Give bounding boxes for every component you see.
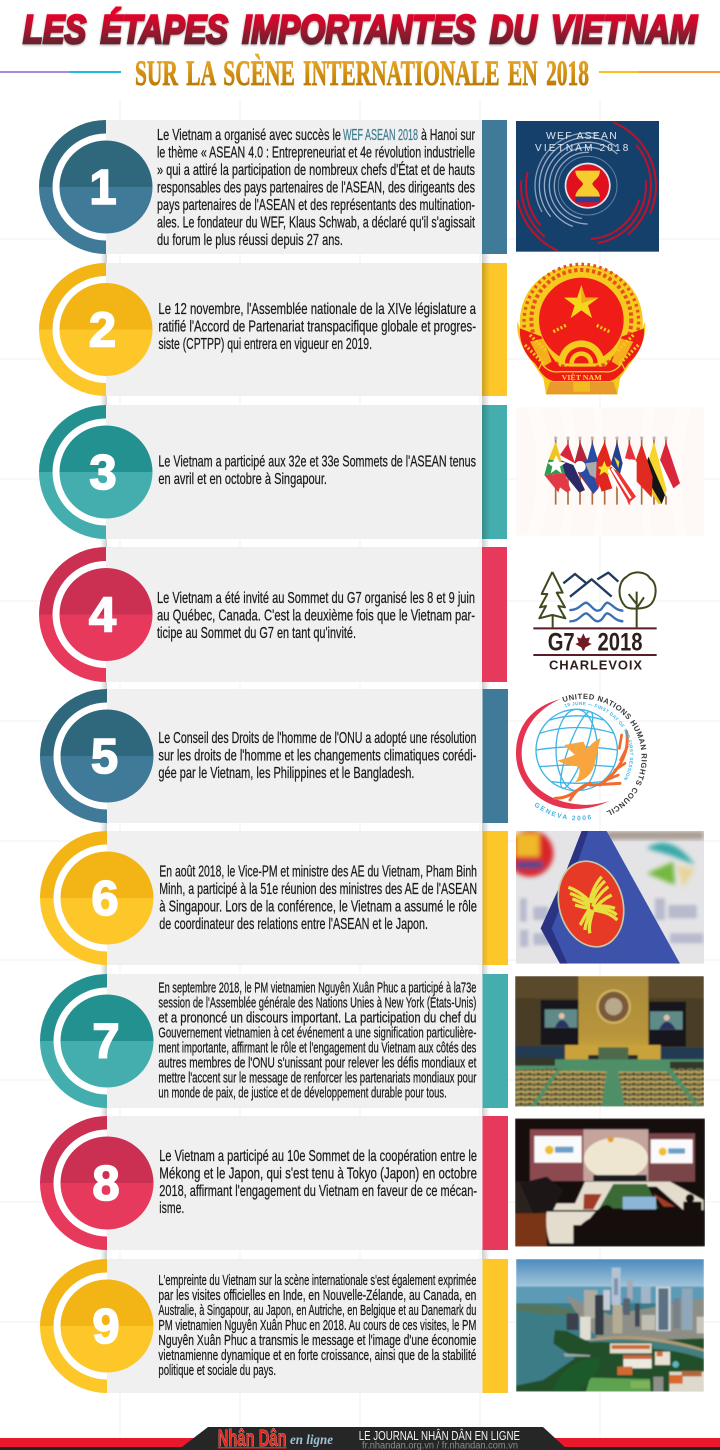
footer bar: [0, 1425, 720, 1450]
footer text: LE JOURNAL NHÂN DÂN EN LIGNE: [359, 1428, 520, 1443]
panel: milestone 2: [39, 263, 645, 396]
text block 6: à Singapour. Lors de la conférence, le Vietnam a assumé le rôle: [159, 899, 477, 916]
text block 9: politique et sociale du pays.: [158, 1363, 276, 1379]
panel: milestone 8: [40, 1116, 705, 1250]
panel: milestone 7: [40, 974, 704, 1108]
text block 4: au Québec, Canada. C'est la deuxième fois que le Vietnam par-: [157, 608, 475, 624]
badge: number 8: [40, 1116, 154, 1250]
image: UN Human Rights Council logo: 19 JUNE — FIRST DAY OF THE FIRST SESSION: [564, 702, 634, 780]
text block 7: mettre l'accent sur le message de renforcer les partenariats mondiaux pour: [158, 1071, 477, 1087]
text block 1: » qui a attiré la participation de nombreux chefs d'État et de hauts: [157, 160, 475, 179]
badge: number 9: [40, 1259, 154, 1393]
text block 1: Le Vietnam a organisé avec succès le: [157, 127, 341, 144]
image: G7 2018 Charlevoix logo: G7: [548, 629, 575, 657]
image: Mekong-Japan summit photo: [515, 1118, 705, 1247]
image: UN Human Rights Council logo: UNITED NATIONS HUMAN RIGHTS COUNCIL: [562, 694, 647, 816]
badge: number 4: 4: [89, 588, 116, 642]
image: WEF ASEAN Vietnam 2018 logo: WEF ASEAN: [546, 131, 617, 142]
text block 4: [157, 590, 475, 642]
text block 7: et a prononcé un discours important. La participation du chef du: [158, 1011, 476, 1027]
image: Singapore skyline photo: [516, 1259, 704, 1392]
text block 5: Le Conseil des Droits de l'homme de l'ONU a adopté une résolution: [158, 730, 476, 747]
text block 6: En août 2018, le Vice-PM et ministre des AE du Vietnam, Pham Binh: [159, 864, 477, 881]
badge: number 8: 8: [92, 1157, 120, 1211]
text block 7: Gouvernement vietnamien à cet événement a une signification particulière-: [158, 1026, 477, 1042]
image: G7 2018 Charlevoix logo: 2018: [598, 629, 643, 657]
text block 7: [158, 981, 477, 1102]
image: G7 2018 Charlevoix logo: CHARLEVOIX: [549, 657, 642, 672]
gap shadows: [100, 246, 490, 1267]
text block 2: Le 12 novembre, l'Assemblée nationale de la XIVe législature a: [158, 301, 476, 318]
image: ASEAN flag photo: [507, 830, 704, 964]
text block 6: Minh, a participé à la 51e réunion des ministres des AE de l'ASEAN: [159, 881, 477, 898]
badge: number 6: [40, 831, 154, 965]
panel: milestone 9: [40, 1259, 704, 1393]
text block 2: ratifié l'Accord de Partenariat transpacifique globale et progres-: [158, 318, 476, 336]
badge: number 6: 6: [91, 872, 119, 926]
text block 1: WEF ASEAN 2018: [343, 127, 418, 144]
text block 1: le thème « ASEAN 4.0 : Entrepreneuriat et 4e révolution industrielle: [157, 144, 475, 162]
text block 9: vietnamienne dynamique et en forte croissance, ainsi que de la stabilité: [158, 1348, 476, 1364]
text block 8: [159, 1148, 477, 1217]
badge: number 7: 7: [92, 1015, 120, 1069]
badge: number 5: [40, 689, 154, 823]
text block 5: sur les droits de l'homme et les changements climatiques corédi-: [158, 748, 476, 764]
text block 2: [158, 301, 476, 353]
badge: number 5: 5: [91, 730, 118, 784]
badge: number 9: 9: [92, 1300, 120, 1354]
panel: milestone 3: [39, 405, 704, 539]
text block 9: PM vietnamien Nguyên Xuân Phuc en 2018. Au cours de ces visites, le PM: [158, 1318, 476, 1334]
image: UN Human Rights Council logo: GENEVA 2006: [534, 802, 591, 820]
badge: number 1: 1: [89, 161, 117, 215]
text block 4: ticipe au Sommet du G7 en tant qu'invité.: [157, 625, 356, 642]
badge: number 3: [39, 405, 152, 539]
text block 8: Le Vietnam a participé au 10e Sommet de la coopération entre le: [159, 1148, 477, 1165]
text block 9: [158, 1273, 476, 1379]
text block 6: [159, 864, 477, 933]
image: UN Human Rights Council logo: [516, 694, 647, 820]
text block 1: du forum le plus réussi depuis 27 ans.: [157, 232, 343, 249]
text block 7: En septembre 2018, le PM vietnamien Nguyên Xuân Phuc a participé à la73e: [158, 981, 476, 997]
text block 1: pays partenaires de l'ASEAN et des représentants des multination-: [157, 197, 475, 214]
image: WEF ASEAN Vietnam 2018 logo: [492, 90, 683, 281]
image: WEF ASEAN Vietnam 2018 logo: VIETNAM 2018: [535, 143, 629, 154]
badge: number 2: [39, 263, 152, 396]
image: ASEAN member flags: [516, 407, 704, 536]
text block 5: [158, 730, 476, 782]
badge: number 2: 2: [89, 304, 116, 358]
text block 1: ales. Le fondateur du WEF, Klaus Schwab, a déclaré qu'il s'agissait: [157, 214, 475, 232]
badge: number 7: [40, 974, 154, 1108]
text block 9: L'empreinte du Vietnam sur la scène internationale s'est également exprimée: [158, 1273, 476, 1289]
badge: number 4: [39, 547, 152, 682]
text block 5: gée par le Vietnam, les Philippines et le Bangladesh.: [158, 765, 414, 782]
text block 7: autres membres de l'ONU s'unissant pour relever les défis mondiaux et: [158, 1056, 476, 1072]
text block 7: ment importante, affirmant le rôle et l'engagement du Vietnam aux côtés des: [158, 1041, 476, 1057]
badge: number 1: [39, 120, 152, 254]
text block 8: 2018, affirmant l'engagement du Vietnam en faveur de ce mécan-: [159, 1183, 477, 1200]
text block 4: Le Vietnam a été invité au Sommet du G7 organisé les 8 et 9 juin: [157, 590, 475, 607]
panel: milestone 5: [40, 689, 647, 823]
text block 8: Mékong et le Japon, qui s'est tenu à Tokyo (Japon) en octobre: [159, 1166, 477, 1182]
text block 1: [157, 127, 475, 249]
image: Vietnam national emblem: VIỆT NAM: [562, 374, 602, 382]
text block 1: responsables des pays partenaires de l'ASEAN, des dirigeants des: [157, 180, 475, 196]
text block 3: [158, 454, 476, 488]
panel: milestone 4: [39, 547, 657, 682]
panel: milestone 6: [40, 830, 704, 965]
image: UN General Assembly photo: [515, 976, 704, 1107]
panel: milestone 1: [39, 90, 683, 281]
text block 3: en avril et en octobre à Singapour.: [158, 471, 327, 488]
image: Vietnam national emblem: [517, 264, 645, 394]
text block 2: siste (CPTPP) qui entrera en vigueur en 2019.: [158, 336, 372, 353]
logo: Nhân Dân en ligne: en ligne: [290, 1433, 333, 1448]
text block 7: un monde de paix, de justice et de développement durable pour tous.: [158, 1086, 447, 1102]
text block 1: à Hanoi sur: [421, 127, 475, 144]
text block 3: Le Vietnam a participé aux 32e et 33e Sommets de l'ASEAN tenus: [158, 454, 476, 471]
footer text: [359, 1428, 520, 1450]
text block 8: isme.: [159, 1200, 184, 1217]
text block 9: Australie, à Singapour, au Japon, en Autriche, en Belgique et au Danemark du: [158, 1303, 476, 1319]
text block 9: Nguyên Xuân Phuc a transmis le message et l'image d'une économie: [158, 1333, 476, 1349]
text block 6: de coordinateur des relations entre l'ASEAN et le Japon.: [159, 916, 428, 933]
text block 7: session de l'Assemblée générale des Nations Unies à New York (États-Unis): [158, 995, 476, 1012]
text block 9: par les visites officielles en Inde, en Nouvelle-Zélande, au Canada, en: [158, 1288, 476, 1304]
image: G7 2018 Charlevoix logo: [533, 572, 657, 672]
badge: number 3: 3: [89, 446, 117, 500]
